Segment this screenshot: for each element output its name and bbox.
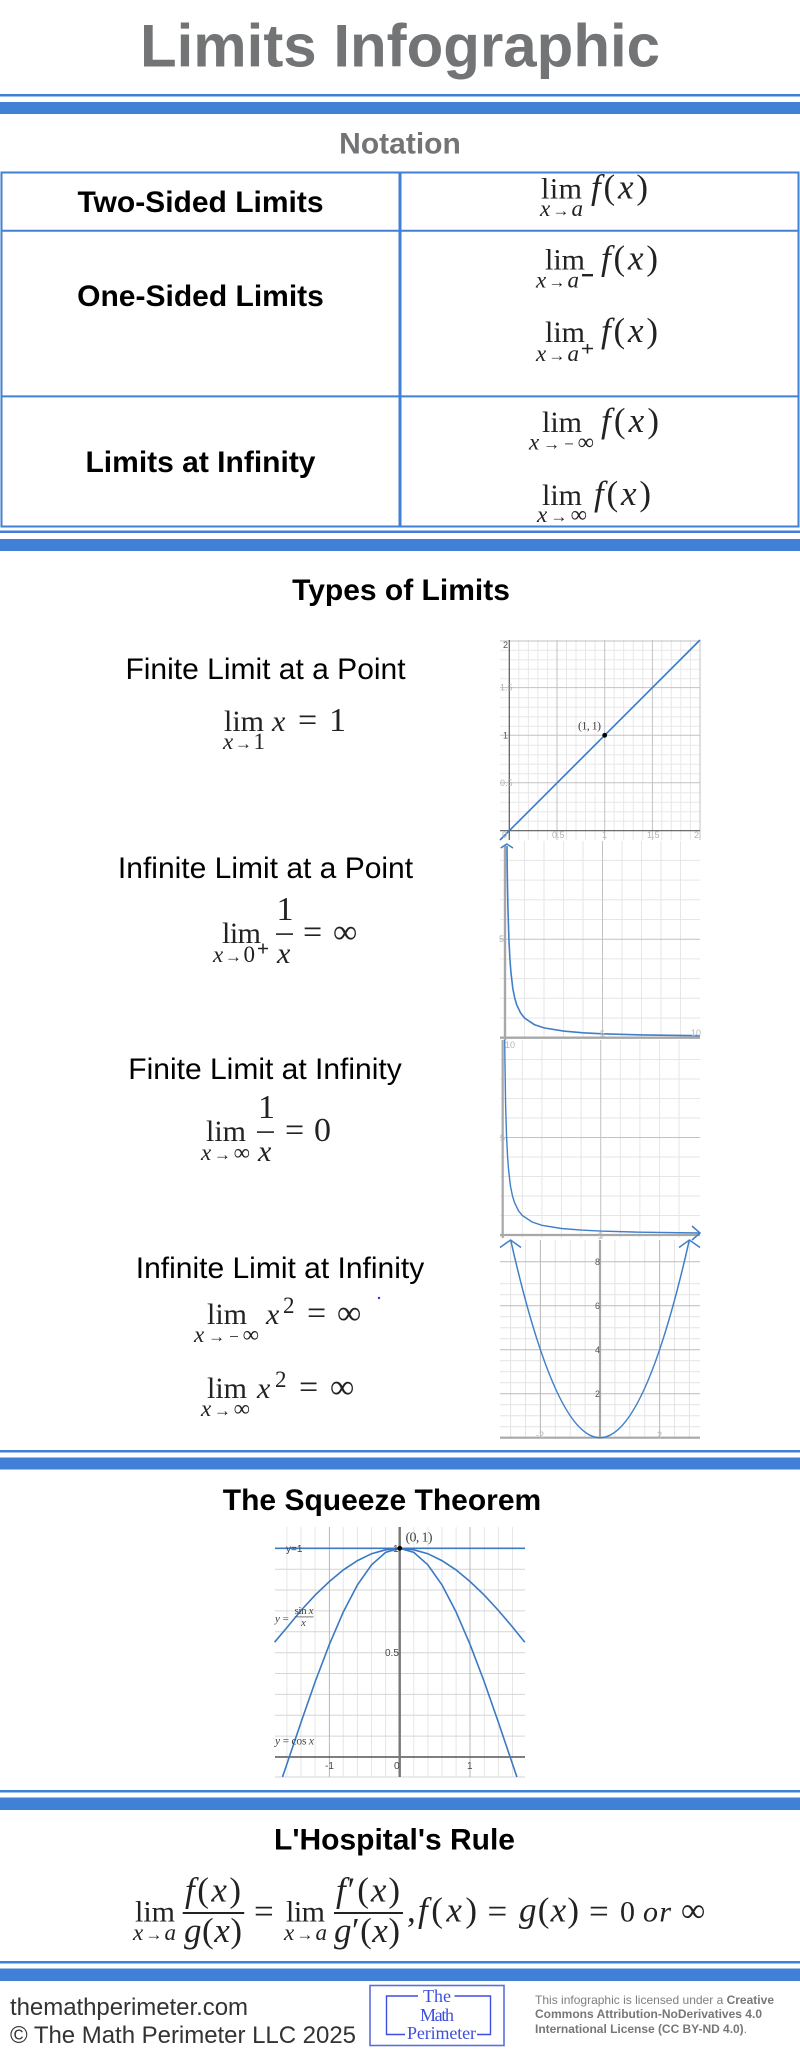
- copyright: © The Math Perimeter LLC 2025: [10, 2022, 356, 2049]
- formula: limit of x squared at infinity: 2: [275, 1367, 286, 1392]
- section divider: [0, 94, 800, 114]
- heading: notation: Notation: [339, 128, 461, 160]
- formula: finite limit at infinity: x: [257, 1135, 272, 1168]
- formula: two-sided limit: x→a: [539, 196, 583, 221]
- panel: the squeeze theorem: [223, 1484, 541, 1777]
- formula: L'Hospital's rule: f(x): [185, 1870, 241, 1910]
- formula: infinite limit at negative infinity: lim: [207, 1298, 247, 1331]
- formula: finite limit at infinity: lim: [206, 1115, 246, 1148]
- heading: types of limits: Types of Limits: [292, 574, 510, 607]
- formula: right-hand limit: [535, 311, 658, 366]
- section divider: [0, 1450, 800, 1470]
- chart: y = x squared: [500, 1240, 700, 1440]
- formula: infinite limit at a point: lim: [222, 917, 261, 950]
- chart: y = x: 1: [602, 830, 607, 840]
- chart: y = x: (1, 1): [578, 718, 601, 732]
- label: infinite limit at infinity: Infinite Limit at Infinity: [136, 1252, 424, 1285]
- section divider: [0, 1961, 800, 1981]
- logo: The Math Perimeter: Math: [420, 2005, 454, 2025]
- chart: squeeze theorem graph: (0, 1): [406, 1530, 433, 1546]
- formula: right-hand limit: f(x): [601, 311, 658, 350]
- chart: y = 1/x toward infinity: 5: [598, 1231, 603, 1241]
- chart: y = x squared: 6: [595, 1301, 600, 1311]
- chart: squeeze theorem graph: 0.5: [385, 1648, 399, 1659]
- formula: L'Hospital's rule: f′(x): [336, 1870, 400, 1910]
- formula: finite limit at a point: lim: [224, 705, 264, 738]
- formula: limit at negative infinity: [528, 401, 659, 454]
- formula: limit of x squared at infinity: [200, 1367, 354, 1421]
- formula: limit of x squared at infinity: ∞: [330, 1369, 354, 1406]
- formula: limit at infinity: [536, 474, 651, 527]
- section divider: [0, 530, 800, 551]
- chart: y = x: [500, 640, 700, 840]
- formula: infinite limit at negative infinity: x: [265, 1298, 280, 1331]
- formula: L'Hospital's rule: g(x): [519, 1890, 579, 1930]
- formula: limit at infinity: lim: [542, 479, 582, 512]
- logo: The Math Perimeter: Perimeter: [407, 2023, 476, 2043]
- formula: limit of x squared at infinity: x: [256, 1372, 271, 1405]
- chart: y = x squared: 2: [595, 1389, 600, 1399]
- formula: finite limit at a point: 1: [329, 702, 346, 739]
- chart: squeeze theorem graph: 1: [393, 1544, 399, 1555]
- chart: y = x squared: -2: [536, 1430, 544, 1440]
- formula: two-sided limit: lim: [541, 172, 582, 206]
- license text: International License (CC BY-ND 4.0).: [535, 2022, 747, 2036]
- formula: L'Hospital's rule: lim: [286, 1896, 325, 1928]
- formula: right-hand limit: lim: [545, 316, 585, 349]
- formula: L'Hospital's rule: =: [254, 1892, 274, 1931]
- formula: L'Hospital's rule: x→a: [283, 1920, 327, 1945]
- formula: finite limit at a point: x: [271, 705, 286, 738]
- chart: y = x: 0: [502, 830, 507, 840]
- formula: infinite limit at a point: x→0: [212, 942, 255, 967]
- section divider: [0, 1790, 800, 1810]
- website: themathperimeter.com: [10, 1994, 248, 2021]
- heading: L'Hospital's rule: L'Hospital's Rule: [274, 1824, 515, 1856]
- formula: finite limit at a point: [222, 702, 346, 754]
- formula: L'Hospital's rule: g(x): [184, 1911, 242, 1950]
- chart: squeeze theorem graph: 1: [467, 1761, 473, 1772]
- formula: finite limit at a point: =: [298, 702, 317, 739]
- formula: L'Hospital's rule: lim: [135, 1896, 175, 1928]
- row label: two-sided limits: Two-Sided Limits: [77, 186, 324, 219]
- formula: infinite limit at a point: [212, 891, 357, 970]
- chart: y = x: 1.5: [500, 682, 513, 692]
- chart: y = x: 0.5: [552, 830, 565, 840]
- chart: squeeze theorem graph: y =: [274, 1613, 289, 1625]
- formula: finite limit at infinity: [200, 1089, 331, 1168]
- row label: limits at infinity: Limits at Infinity: [85, 446, 316, 479]
- formula: finite limit at infinity: x→∞: [200, 1140, 250, 1165]
- logo: The Math Perimeter: [370, 1986, 504, 2046]
- row label: one-sided limits: One-Sided Limits: [77, 280, 324, 313]
- formula: L'Hospital's rule: =: [589, 1892, 609, 1931]
- chart: y = 1/x toward infinity: 5: [500, 1133, 505, 1143]
- chart: y = 1/x toward infinity: [500, 1040, 700, 1241]
- formula: left-hand limit: f(x): [601, 238, 658, 278]
- formula: left-hand limit: lim: [545, 244, 585, 276]
- panel: L'Hospital's rule: [132, 1824, 705, 1950]
- formula: two-sided limit: f(x): [591, 168, 648, 206]
- license text: Commons Attribution-NoDerivatives 4.0: [535, 2007, 762, 2021]
- formula: infinite limit at negative infinity: 2: [283, 1293, 294, 1318]
- notation table grid: [2, 172, 798, 526]
- chart: y = x: 1: [503, 730, 508, 740]
- chart: squeeze theorem graph: y = cos x: [274, 1736, 315, 1748]
- chart: y = x: 2: [694, 830, 699, 840]
- chart: squeeze theorem graph: [274, 1527, 525, 1777]
- formula: L'Hospital's rule: x→a: [132, 1920, 176, 1945]
- footer: [10, 1986, 774, 2049]
- chart: y = x: 2: [503, 640, 508, 650]
- formula: left-hand limit: [535, 238, 658, 292]
- formula: infinite limit at a point: ∞: [333, 914, 357, 951]
- formula: L'Hospital's rule: f(x): [418, 1890, 477, 1930]
- formula: finite limit at infinity: =: [285, 1112, 304, 1149]
- chart: y = 1/x toward infinity: 10: [505, 1040, 515, 1050]
- formula: limit of x squared at infinity: =: [299, 1369, 318, 1406]
- formula: infinite limit at negative infinity: [193, 1293, 361, 1347]
- formula: infinite limit at negative infinity: x→−∞: [193, 1322, 259, 1347]
- label: finite limit at infinity: Finite Limit at Infinity: [128, 1053, 402, 1086]
- chart: y = 1/x near zero: 5: [499, 934, 504, 944]
- formula: finite limit at infinity: 1: [258, 1089, 275, 1126]
- formula: finite limit at a point: x→1: [222, 729, 265, 754]
- formula: L'Hospital's rule: ,: [407, 1890, 416, 1930]
- formula: limit at negative infinity: lim: [542, 406, 582, 439]
- formula: infinite limit at negative infinity: ∞: [337, 1295, 361, 1332]
- chart: y = x: 0.5: [500, 778, 513, 788]
- label: finite limit at a point: Finite Limit at a Point: [125, 653, 406, 686]
- formula: two-sided limit: [539, 168, 648, 221]
- license text: This infographic is licensed under a Creative: [535, 1993, 774, 2007]
- chart: squeeze theorem graph: y=1: [286, 1544, 303, 1555]
- formula: L'Hospital's rule: or: [643, 1896, 671, 1928]
- formula: limit at negative infinity: f(x): [601, 401, 659, 440]
- license text: [535, 1993, 774, 2036]
- formula: infinite limit at a point: x: [276, 937, 291, 970]
- heading: the squeeze theorem: The Squeeze Theorem: [223, 1484, 541, 1517]
- formula: limit at infinity: f(x): [594, 474, 651, 513]
- logo: The Math Perimeter: The: [423, 1986, 451, 2006]
- title: Limits Infographic: [140, 12, 660, 80]
- chart: squeeze theorem graph: x: [300, 1617, 306, 1629]
- chart: y = x: 1.5: [647, 830, 660, 840]
- chart: squeeze theorem graph: sin x: [294, 1605, 314, 1617]
- formula: limit of x squared at infinity: x→∞: [200, 1396, 250, 1421]
- formula: limit at negative infinity: x→−∞: [528, 430, 594, 454]
- chart: y = 1/x near zero: [499, 841, 701, 1040]
- formula: L'Hospital's rule: g′(x): [334, 1911, 400, 1950]
- formula: infinite limit at a point: 1: [276, 891, 294, 928]
- formula: finite limit at infinity: 0: [314, 1112, 331, 1149]
- chart: y = 1/x near zero: 5: [600, 1029, 605, 1039]
- formula: right-hand limit: x→a: [535, 341, 579, 366]
- formula: L'Hospital's rule: =: [488, 1892, 507, 1931]
- formula: L'Hospital's rule: 0: [620, 1896, 635, 1928]
- stray blue dot: [378, 1297, 380, 1299]
- panel: notation: [2, 128, 798, 527]
- formula: left-hand limit: x→a: [535, 268, 579, 292]
- chart: y = x squared: 8: [595, 1257, 600, 1267]
- formula: limit at infinity: x→∞: [536, 502, 587, 527]
- chart: squeeze theorem graph: 0: [394, 1761, 400, 1772]
- formula: infinite limit at a point: =: [303, 914, 322, 951]
- formula: L'Hospital's rule: ∞: [681, 1892, 705, 1930]
- formula: L'Hospital's rule: [132, 1870, 705, 1950]
- panel: types of limits: [118, 574, 701, 1440]
- chart: y = x squared: 4: [595, 1345, 600, 1355]
- formula: limit of x squared at infinity: lim: [207, 1372, 247, 1405]
- chart: y = 1/x near zero: 10: [691, 1028, 701, 1038]
- chart: y = x squared: 2: [657, 1430, 662, 1440]
- label: infinite limit at a point: Infinite Limit at a Point: [118, 852, 414, 885]
- formula: infinite limit at negative infinity: =: [307, 1295, 326, 1332]
- chart: squeeze theorem graph: -1: [325, 1761, 334, 1772]
